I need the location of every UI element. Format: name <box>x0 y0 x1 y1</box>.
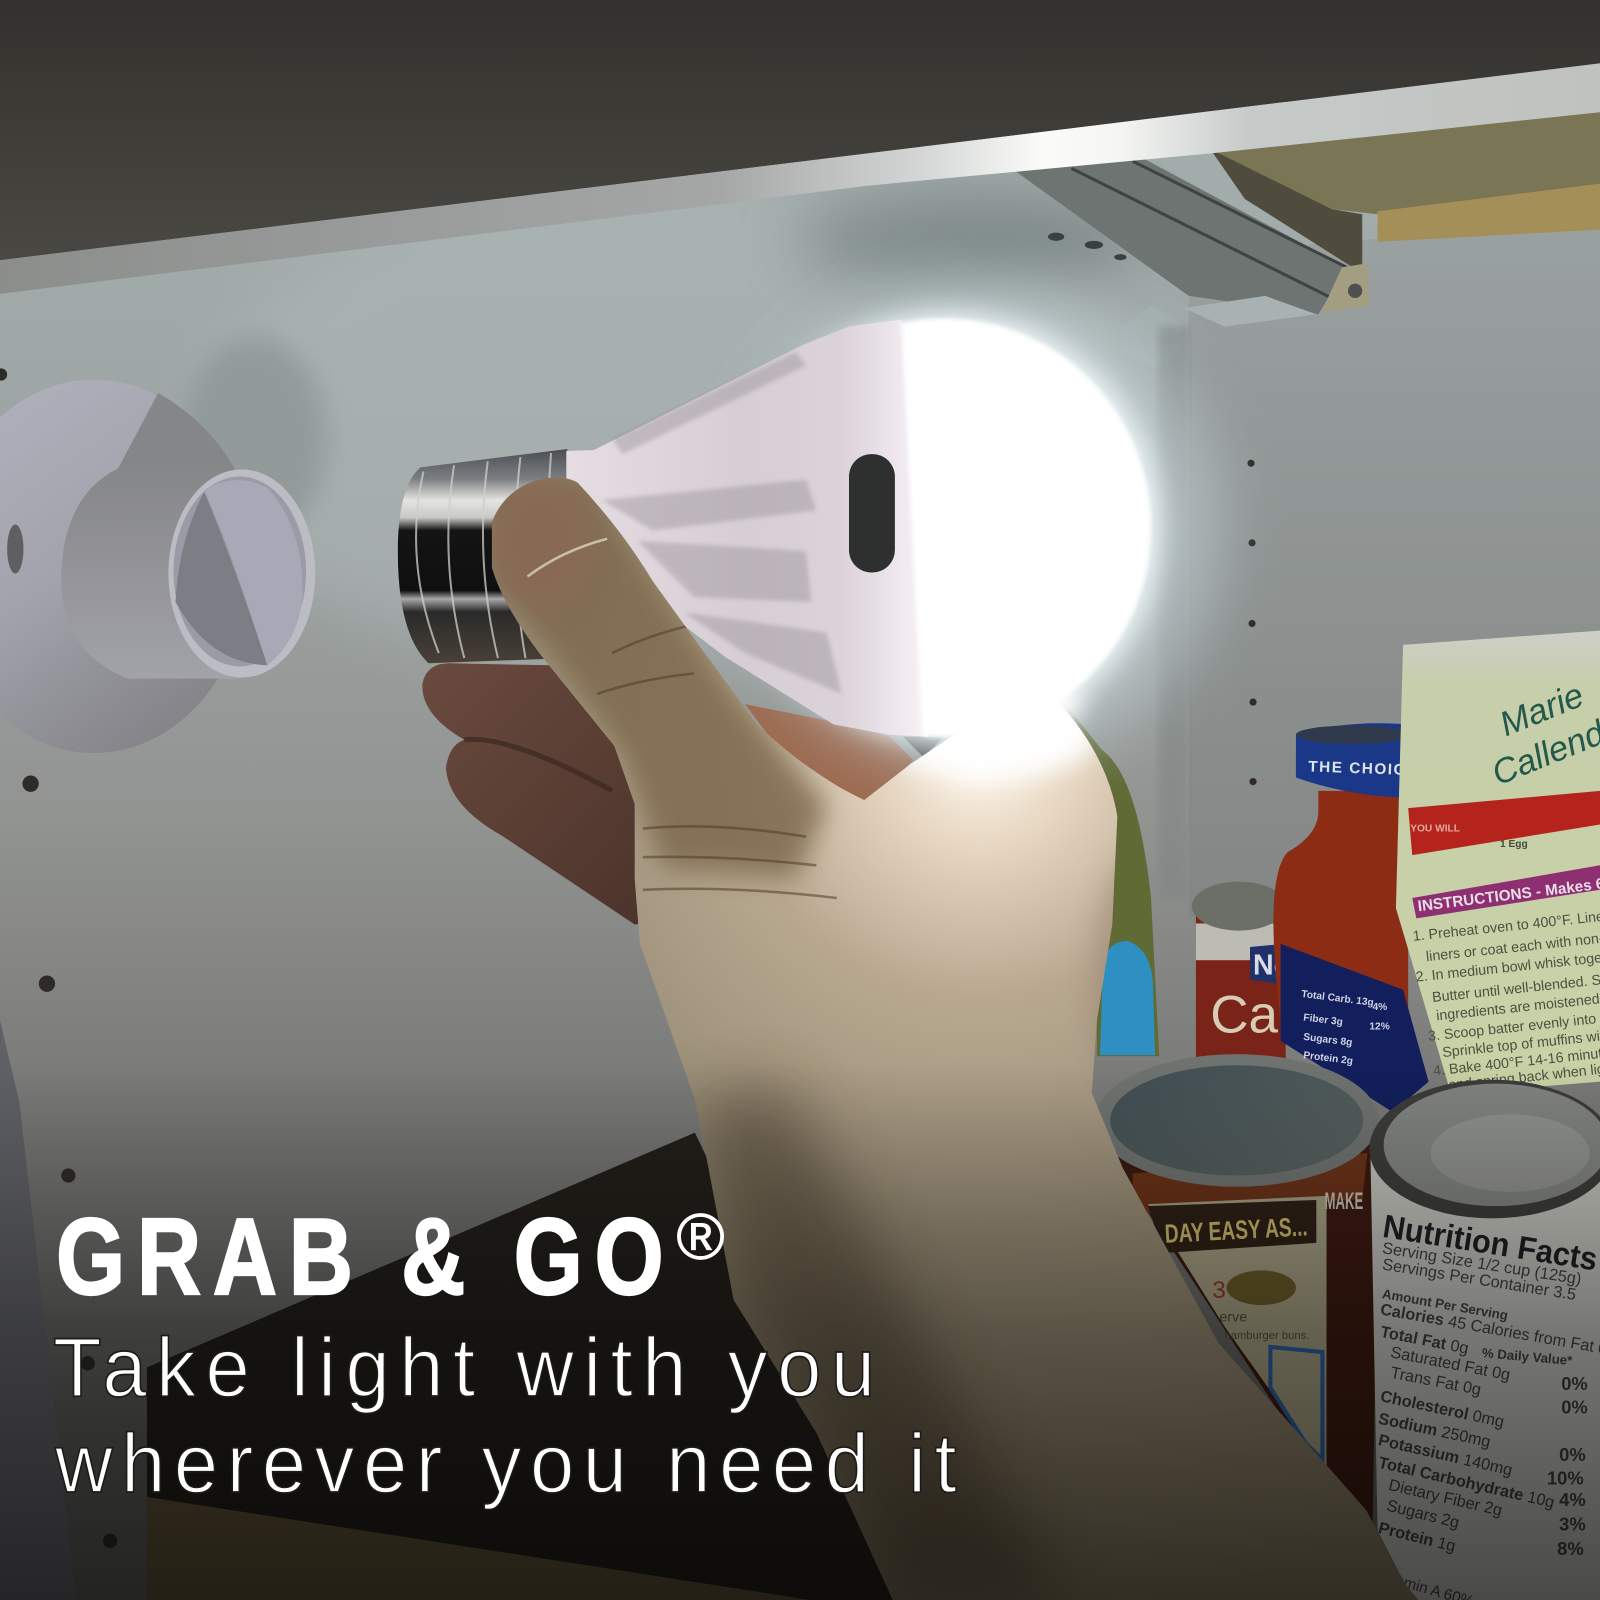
shelf underside right <box>1214 110 1600 214</box>
small red can: Ne <box>1253 949 1290 981</box>
muffin mix package: 1 Egg <box>1500 839 1528 850</box>
front left can <box>1095 1054 1380 1531</box>
front left can: 3 <box>1212 1277 1226 1304</box>
front right can with nutrition label: 3% <box>1559 1514 1586 1535</box>
cabinet right wall <box>1189 219 1600 918</box>
lower cabinet shelf <box>147 1133 918 1600</box>
sauce jar: 4% <box>1372 1002 1387 1013</box>
bulb socket fixture <box>0 337 327 753</box>
left side panel <box>0 1021 36 1256</box>
muffin mix package <box>1396 631 1600 1094</box>
metal screw base <box>398 449 567 663</box>
bulb body <box>566 319 929 737</box>
front left can: hamburger buns. <box>1224 1330 1309 1342</box>
hand and arm <box>469 459 1439 1600</box>
background groceries <box>1057 631 1600 1112</box>
front right can with nutrition label: Sugars 2g <box>1385 1497 1461 1532</box>
wood strip <box>1378 184 1600 242</box>
bulb body fins <box>602 352 842 694</box>
front right can with nutrition label: Amount Per Serving <box>1381 1286 1509 1323</box>
top shelf dark face <box>0 0 1600 260</box>
sauce jar: THE CHOICE OF <box>1308 758 1448 780</box>
bulb <box>398 318 1151 737</box>
wall peg holes <box>0 368 1257 1548</box>
sauce jar: Total Carb. 13g <box>1301 989 1374 1009</box>
front right can with nutrition label: Servings Per Container 3.5 <box>1381 1256 1577 1304</box>
sauce jar <box>1273 723 1428 1110</box>
sauce jar: Sugars 8g <box>1303 1032 1353 1049</box>
front right can with nutrition label: % Daily Value* <box>1481 1345 1574 1368</box>
front right can with nutrition label: Total Carbohydrate 10g <box>1377 1454 1556 1512</box>
front left can: erve <box>1219 1309 1247 1325</box>
bottom dark overlay <box>0 1061 1600 1600</box>
front right can with nutrition label: 0% <box>1561 1373 1588 1394</box>
shelf front edge wood <box>147 1497 810 1600</box>
bulb glow <box>735 291 1219 770</box>
front left can: MAKE <box>1324 1188 1363 1215</box>
front right can with nutrition label: Trans Fat 0g <box>1389 1364 1483 1399</box>
muffin mix package: YOU WILL <box>1410 824 1460 835</box>
front right can with nutrition label: 10% <box>1547 1468 1584 1489</box>
front right can with nutrition label: Dietary Fiber 2g <box>1387 1476 1504 1520</box>
skin creases <box>597 622 837 898</box>
drawer rail <box>1016 152 1370 326</box>
front right can with nutrition label: 0% <box>1561 1396 1588 1417</box>
sauce jar: Protein 2g <box>1303 1050 1353 1067</box>
lit globe <box>737 318 1151 737</box>
front right can with nutrition label: Sodium 250mg <box>1377 1410 1492 1451</box>
subheading text <box>53 1321 957 1510</box>
green salad bag <box>1067 710 1160 1056</box>
front right can with nutrition label: 8% <box>1557 1538 1584 1559</box>
small red can: Carn <box>1210 986 1325 1045</box>
bulb light spill on palm <box>929 671 1082 737</box>
wall corner strip <box>1158 327 1189 898</box>
switch <box>849 454 895 572</box>
subheading text: wherever you need it <box>54 1417 957 1510</box>
subheading text: Take light with you <box>53 1321 875 1414</box>
lit shelf edge <box>0 63 1600 294</box>
muffin mix package: Marie <box>1494 676 1589 744</box>
front right can with nutrition label: Protein 1g <box>1377 1519 1457 1556</box>
headline: Grab & Go: ® <box>677 1200 725 1273</box>
fingers behind the bulb <box>422 663 944 924</box>
front right can with nutrition label: 4% <box>1559 1489 1586 1510</box>
front right can with nutrition label <box>1369 1080 1600 1600</box>
small red can <box>1192 882 1286 1058</box>
front left can: DAY EASY AS... <box>1164 1211 1308 1249</box>
front right can with nutrition label: Total Fat 0g <box>1379 1323 1470 1358</box>
front right can with nutrition label: Cholesterol 0mg <box>1379 1387 1506 1431</box>
front right can with nutrition label: Serving Size 1/2 cup (125g) <box>1381 1239 1583 1289</box>
wall light from bulb <box>282 239 840 670</box>
sauce jar: Fiber 3g <box>1303 1012 1343 1028</box>
headline: Grab & Go: GRAB & GO <box>56 1195 664 1317</box>
front right can with nutrition label: 0% <box>1559 1444 1586 1465</box>
sauce jar: 12% <box>1369 1022 1390 1033</box>
front right can with nutrition label: Saturated Fat 0g <box>1389 1343 1512 1384</box>
front right can with nutrition label: Potassium 140mg <box>1377 1431 1514 1480</box>
wall shadow below rail <box>796 194 1143 286</box>
blue bottle cap <box>1100 941 1155 1055</box>
